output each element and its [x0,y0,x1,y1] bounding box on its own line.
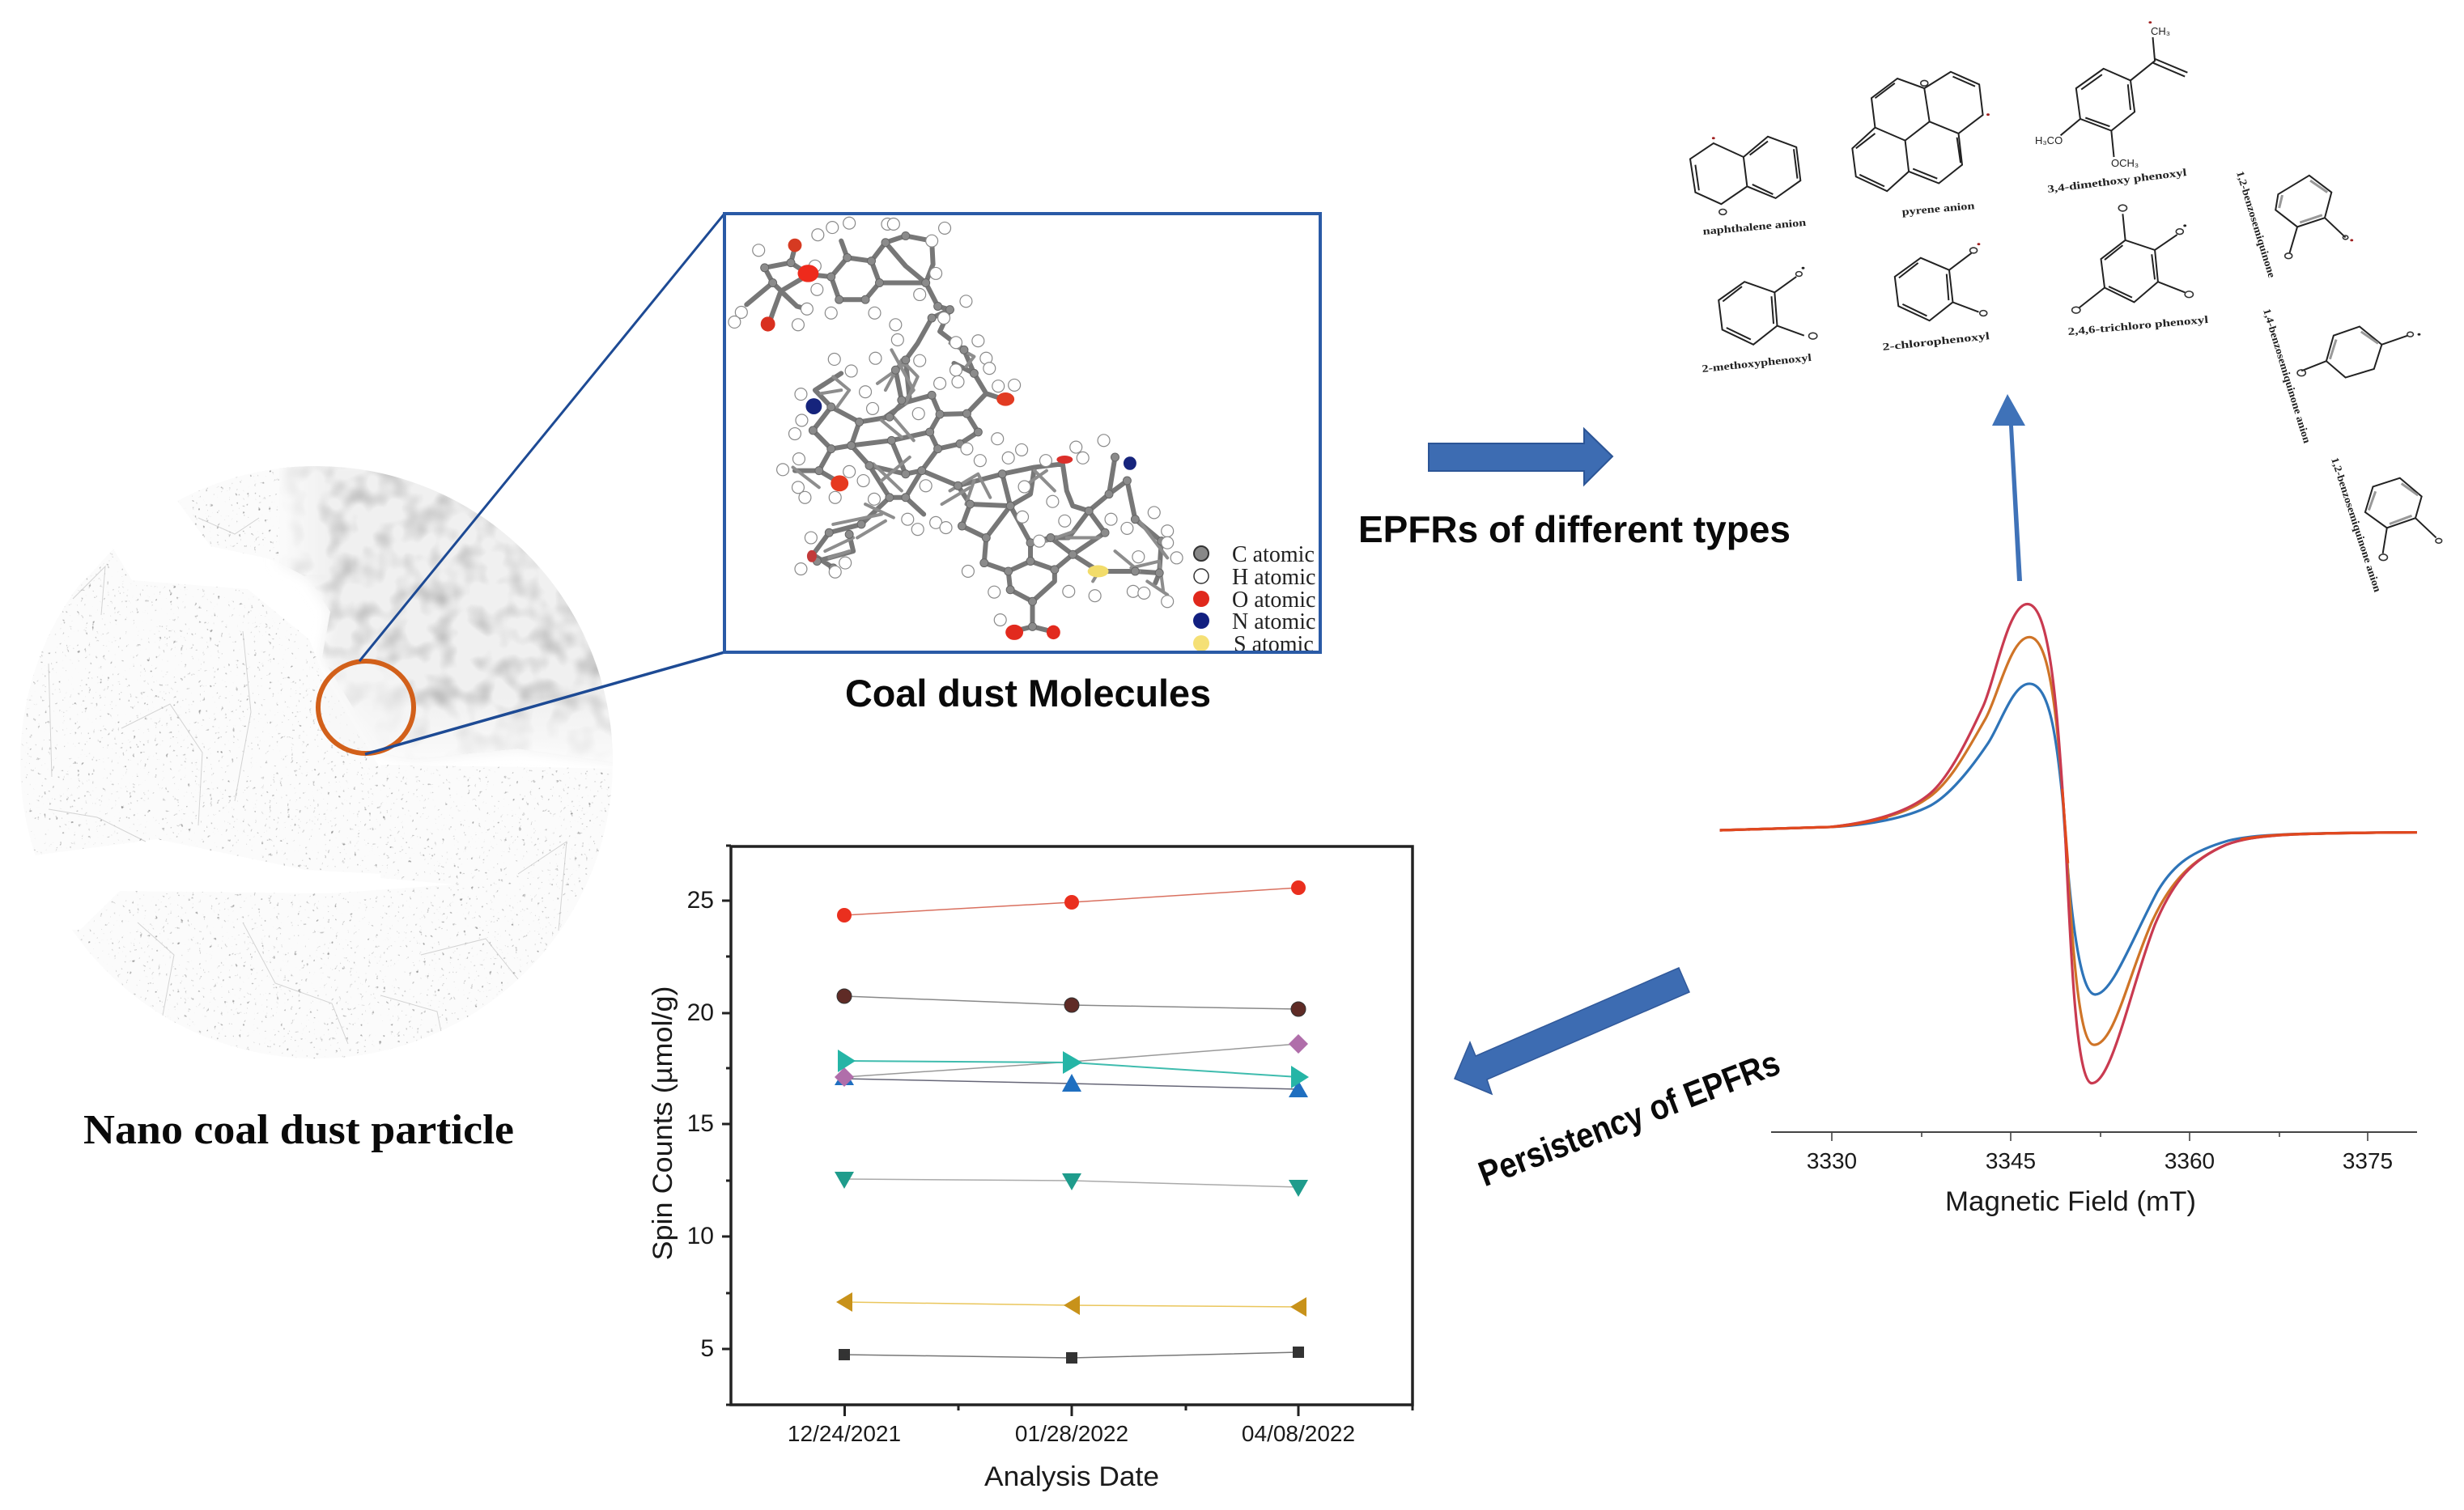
panel: EPFR chemical structures [1690,21,2442,594]
legend: atom types: C atomic [1232,542,1315,567]
label: dimethoxy phenoxyl: 3,4-dimethoxy phenoxyl [2047,166,2188,195]
x axis title: Analysis Date [984,1461,1159,1492]
heading: nano coal dust particle: Nano coal dust particle [83,1107,514,1153]
y tick labels: 15 [687,1110,714,1137]
y tick labels [687,887,714,1362]
chart: EPR spectrum [1720,604,2417,1217]
x tick labels: 04/08/2022 [1242,1421,1355,1446]
series: gold left triangles [836,1292,1306,1317]
heading: persistency of EPFRs: Persistency of EPFRs [1473,1043,1785,1194]
structures drawing [1690,21,2442,561]
arrow: to EPFR types [1429,429,1612,485]
legend: atom types: O atomic [1232,587,1315,613]
spectrum curves [1720,604,2417,1084]
y tick labels: 10 [687,1223,714,1249]
panel: coal dust molecule structure [724,214,1320,657]
series: red circles [837,880,1306,923]
EPR axis: 3330 [1807,1148,1857,1173]
substituent: H3CO: H₃CO [2035,134,2063,146]
chart: spin counts over analysis date [648,846,1413,1492]
arrow: up to structures [1992,394,2025,581]
legend: atom types: H atomic [1232,565,1315,590]
y tick labels: 5 [700,1335,714,1362]
heading: coal dust molecules: Coal dust Molecules [845,672,1211,715]
y axis title: Spin Counts (µmol/g) [648,986,678,1261]
label: methoxyphenoxyl: 2-methoxyphenoxyl [1701,351,1812,375]
x tick labels [788,1421,1355,1446]
arrow: persistency [1455,968,1689,1094]
x tick labels: 01/28/2022 [1015,1421,1128,1446]
series: brown hexagons [837,989,1306,1016]
x tick labels: 12/24/2021 [788,1421,901,1446]
EPR axis: 3345 [1986,1148,2036,1173]
series: black squares [839,1347,1304,1364]
EPR axis: 3360 [2164,1148,2215,1173]
series: blue up triangles [835,1069,1308,1097]
plot frame [731,846,1413,1405]
substituent: CH3: CH₃ [2151,25,2170,37]
series: teal right triangles [838,1050,1309,1088]
molecule frame [724,214,1320,652]
series: purple diamonds [835,1034,1308,1087]
label: pyrene: pyrene anion [1901,199,1976,218]
label: trichloro phenoxyl: 2,4,6-trichloro phenoxyl [2067,313,2209,337]
zoom line: upper connector [359,214,724,661]
label: chlorophenoxyl: 2-chlorophenoxyl [1882,329,1990,353]
y tick labels: 25 [687,887,714,914]
label: naphthalene: naphthalene anion [1702,216,1808,237]
legend: atom types: N atomic [1232,609,1315,634]
substituent: OCH3: OCH₃ [2111,157,2139,169]
label: benzosemiquinone 1: 1,2-benzosemiquinone [2234,169,2279,279]
magnified region ring [318,661,414,753]
y tick labels: 20 [687,999,714,1026]
EPR axis title: Magnetic Field (mT) [1945,1186,2196,1217]
panel: nano coal dust particle disc [16,461,631,1092]
legend: atom types [1193,542,1315,657]
label: benzosemiquinone 3: 1,2-benzosemiquinone anion [2329,456,2384,594]
heading: EPFRs of different types: EPFRs of different types [1358,508,1791,550]
molecule ball and stick model [729,217,1183,640]
label: benzosemiquinone 2: 1,4-benzosemiquinone anion [2261,307,2313,445]
EPR axis [1771,1132,2417,1173]
zoom line: lower connector [365,652,724,754]
axis ticks [722,846,1413,1416]
legend: atom types: S atomic [1234,632,1314,657]
series: green down triangles [835,1172,1308,1197]
EPR axis: 3375 [2343,1148,2393,1173]
